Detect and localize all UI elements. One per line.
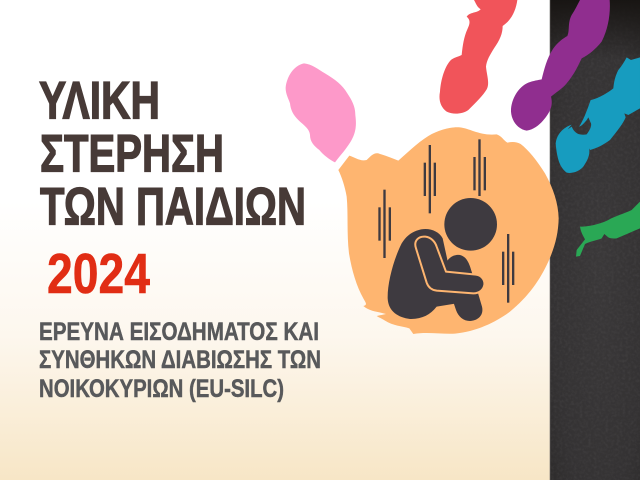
finger: blue <box>556 57 640 173</box>
body <box>388 229 457 319</box>
year: 2024 <box>47 242 150 306</box>
subtitle: ΝΟΙΚΟΚΥΡΙΩΝ (EU-SILC) <box>39 375 284 403</box>
rain lines <box>378 139 514 303</box>
legs <box>445 255 482 321</box>
finger: pink <box>286 63 356 162</box>
finger: green <box>576 202 640 257</box>
subtitle <box>39 318 321 403</box>
chalkboard panel <box>550 0 640 480</box>
arm <box>415 237 484 293</box>
palm <box>338 127 559 334</box>
subtitle: ΕΡΕΥΝΑ ΕΙΣΟΔΗΜΑΤΟΣ ΚΑΙ <box>39 318 319 346</box>
icon: crouching child <box>388 198 497 321</box>
finger: purple <box>511 0 610 131</box>
subtitle: ΣΥΝΘΗΚΩΝ ΔΙΑΒΙΩΣΗΣ ΤΩΝ <box>39 346 321 374</box>
handprint illustration <box>286 0 640 334</box>
title <box>39 72 306 236</box>
title: ΣΤΕΡΗΣΗ <box>40 124 224 184</box>
title: ΥΛΙΚΗ <box>39 72 160 130</box>
title: ΤΩΝ ΠΑΙΔΙΩΝ <box>40 178 306 236</box>
head <box>444 198 497 251</box>
finger: red <box>439 0 517 114</box>
